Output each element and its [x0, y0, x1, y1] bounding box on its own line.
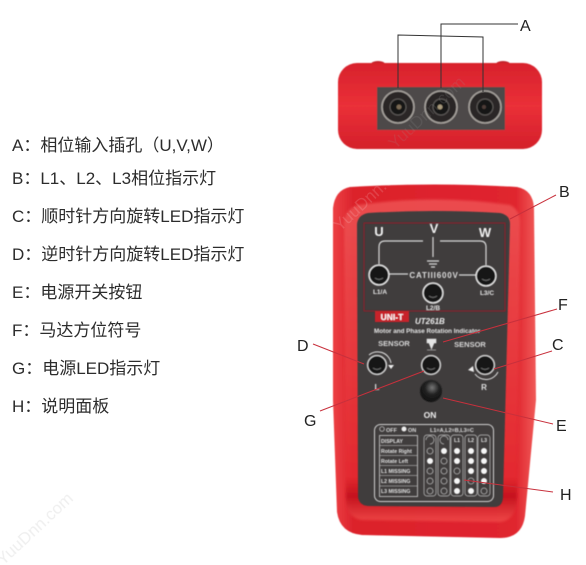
sensors and indicators: R	[481, 383, 487, 392]
panel: phase sockets: CATIII600V	[409, 271, 459, 280]
legend F: F：马达方位符号	[12, 321, 141, 340]
main device body	[333, 184, 536, 538]
callout letters: D	[297, 338, 309, 355]
legend C: C：顺时针方向旋转LED指示灯	[12, 207, 244, 226]
instruction table: L2	[468, 438, 474, 444]
watermarks	[0, 73, 469, 565]
instruction table: OFF	[386, 428, 398, 434]
callout letters	[297, 184, 572, 504]
callout A: bracket lines	[398, 24, 518, 92]
legend G: G：电源LED指示灯	[12, 359, 160, 378]
panel: phase sockets	[364, 221, 505, 312]
panel: phase sockets: L1/A	[373, 289, 387, 296]
instruction table: DISPLAY	[381, 439, 404, 445]
black face panel	[357, 211, 510, 507]
instruction table: ON	[408, 428, 416, 434]
label A: A	[520, 18, 531, 35]
instruction table	[374, 424, 494, 502]
instruction table: Rotate Left	[381, 459, 408, 465]
instruction table: L3	[481, 438, 487, 444]
logo and model: UNI-T	[381, 312, 404, 322]
sensors and indicators: ON	[424, 410, 436, 420]
instruction table: L1	[454, 438, 460, 444]
panel: phase sockets: L2/B	[426, 305, 440, 312]
logo and model	[374, 311, 481, 335]
panel: phase sockets: V	[430, 221, 439, 236]
legend H: H：说明面板	[12, 397, 109, 416]
callout letters: G	[304, 413, 316, 430]
legend D: D：逆时针方向旋转LED指示灯	[12, 245, 244, 264]
top view of device	[338, 61, 542, 149]
callout letters: E	[556, 418, 567, 435]
callout letters: C	[552, 337, 564, 354]
watermarks: YuuDnn.com	[330, 155, 414, 235]
instruction table: L1=A,L2=B,L3=C	[430, 428, 474, 434]
sensors and indicators: SENSOR	[454, 340, 486, 349]
legend E: E：电源开关按钮	[12, 283, 142, 302]
logo and model: Motor and Phase Rotation Indicator	[374, 328, 481, 335]
instruction table: L3 MISSING	[381, 489, 410, 495]
watermarks: YuuDnn.com	[385, 73, 469, 153]
panel: phase sockets: U	[374, 224, 384, 239]
instruction table: L1 MISSING	[381, 469, 410, 475]
sensors and indicators	[368, 339, 498, 420]
callout letters: F	[558, 297, 568, 314]
callout letters: H	[560, 487, 572, 504]
legend A: A：相位输入插孔（U,V,W）	[12, 136, 224, 155]
panel: phase sockets: L3/C	[480, 290, 494, 297]
sensors and indicators: SENSOR	[378, 339, 410, 348]
logo and model: UT261B	[415, 317, 445, 326]
callout letters: B	[559, 184, 570, 201]
sensors and indicators: L	[375, 383, 380, 392]
callout lines B to H	[313, 195, 557, 492]
instruction table: Rotate Right	[381, 449, 412, 455]
legend B: B：L1、L2、L3相位指示灯	[12, 169, 216, 188]
panel: phase sockets: W	[479, 225, 492, 240]
instruction table: L2 MISSING	[381, 479, 410, 485]
